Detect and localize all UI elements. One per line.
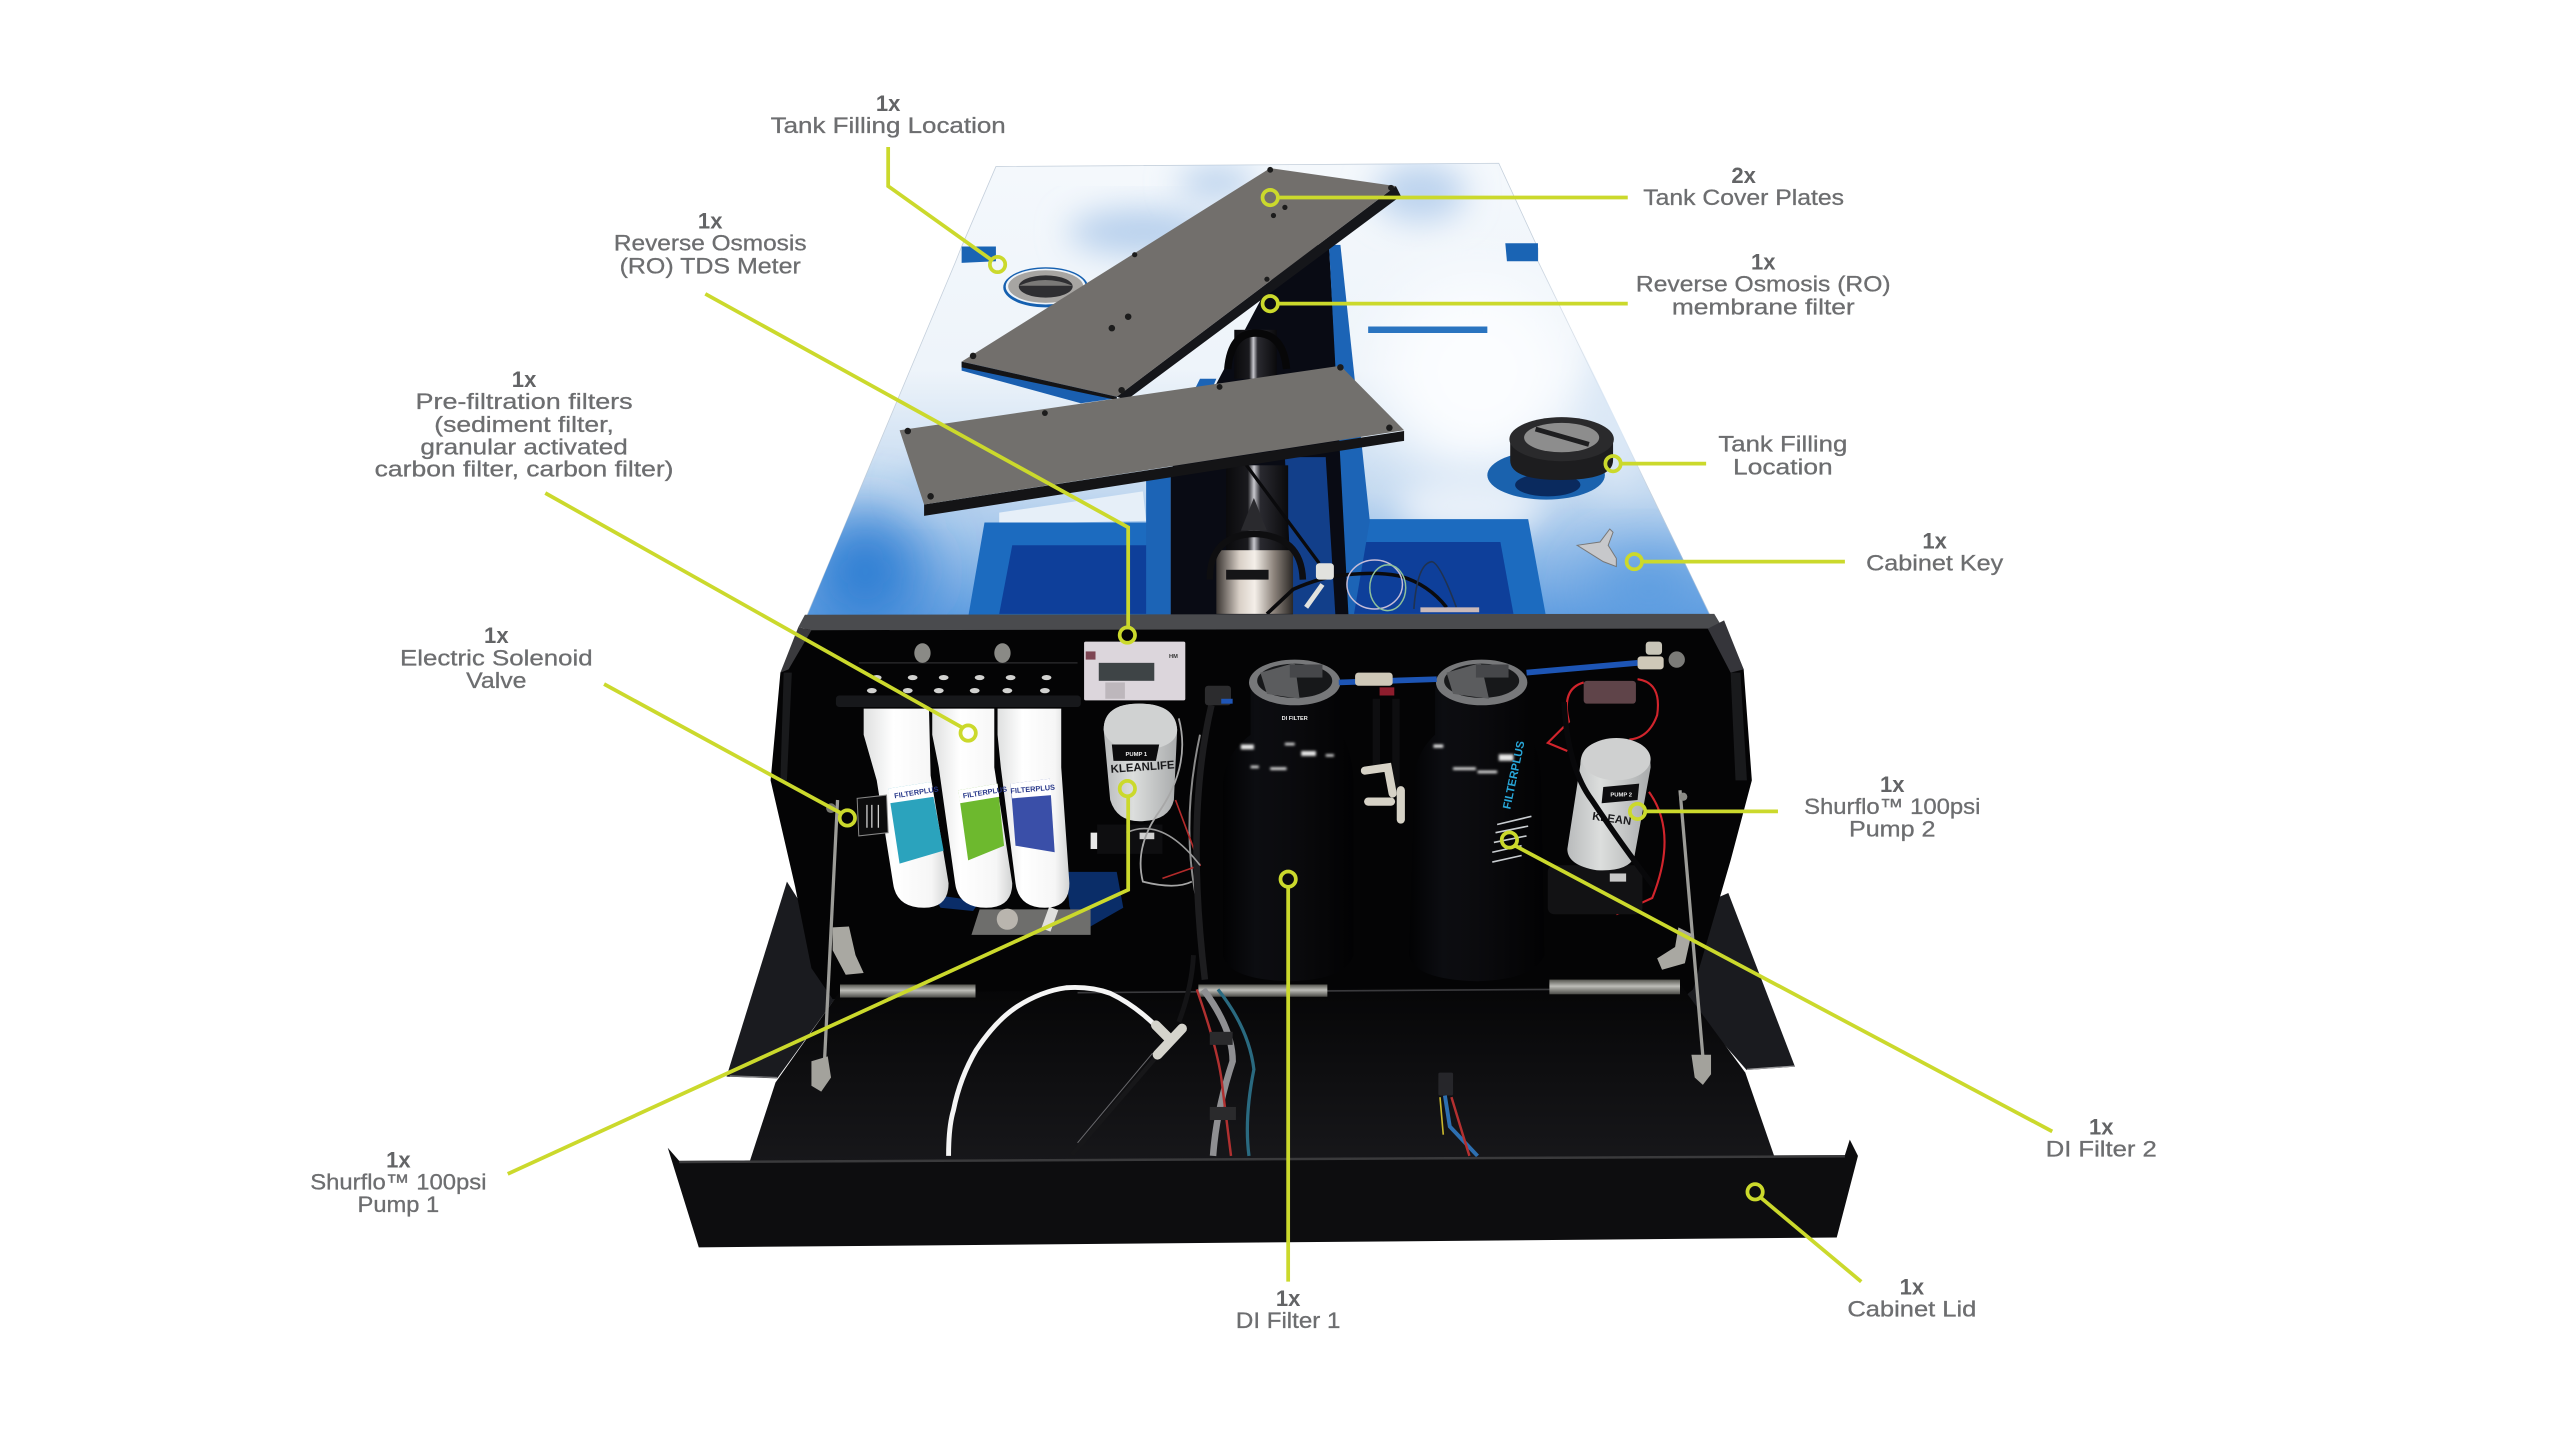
label: Reverse Osmosis — [614, 231, 807, 256]
cabinet lid front panel — [668, 1140, 1858, 1247]
right lid stay — [1657, 790, 1711, 1085]
label: DI Filter 1 — [1236, 1308, 1340, 1333]
hinges — [840, 980, 1680, 998]
mounting bracket with fittings — [836, 643, 1081, 707]
label: 1x — [386, 1147, 411, 1172]
label: Tank Filling — [1718, 431, 1847, 456]
DI filter 2 brand label — [1492, 740, 1531, 862]
leader line — [1278, 196, 1628, 199]
callout: RO TDS meter — [614, 209, 1135, 643]
callout: pre-filtration filters — [375, 367, 976, 741]
label: carbon filter, carbon filter) — [375, 457, 673, 482]
label: 1x — [1900, 1275, 1925, 1300]
blue feed pipe and fitting — [1527, 642, 1685, 673]
label: 1x — [1276, 1286, 1301, 1311]
RO membrane housing — [1210, 330, 1479, 614]
callout: tank cover plates — [1263, 163, 1844, 210]
filling location, right cap and opening — [1487, 417, 1614, 500]
Shurflo pump 2: PUMP 2 — [1610, 793, 1633, 799]
filter label: carbon — [1010, 779, 1055, 852]
marker — [840, 810, 855, 826]
label: Cabinet Key — [1866, 551, 2003, 576]
tank cover plate, upper — [962, 167, 1401, 403]
label: DI Filter 2 — [2046, 1137, 2157, 1162]
marker — [1630, 804, 1645, 819]
leader line — [705, 294, 1128, 627]
Shurflo pump 1 — [1091, 704, 1177, 854]
label: Shurflo™ 100psi — [310, 1169, 487, 1194]
marker — [1120, 627, 1135, 643]
left pit — [968, 522, 1171, 617]
label: 1x — [484, 623, 509, 648]
callout: electric solenoid valve — [400, 623, 855, 826]
marker — [1120, 781, 1135, 796]
label: 1x — [1922, 529, 1948, 554]
fuse holder and red wiring — [1548, 679, 1665, 914]
marker — [1502, 832, 1517, 848]
label: 1x — [1751, 249, 1776, 274]
label: 1x — [698, 209, 723, 234]
filter label: carbon: FILTERPLUS — [1010, 783, 1055, 795]
leader line — [1278, 303, 1628, 305]
label: Tank Filling Location — [771, 113, 1006, 138]
label: Tank Cover Plates — [1643, 185, 1844, 210]
label: Pre-filtration filters — [416, 389, 633, 414]
Shurflo pump 1: PUMP 1 — [1125, 752, 1148, 758]
DI filter 1: DI FILTER — [1282, 716, 1308, 722]
callout: tank filling location, top — [771, 91, 1006, 272]
Shurflo pump 2: KLEAN — [1591, 811, 1632, 828]
slot — [1368, 327, 1487, 333]
tank cover plate, lower — [900, 364, 1404, 516]
cable harness — [1197, 989, 1254, 1156]
label: Reverse Osmosis (RO) — [1636, 271, 1891, 296]
filter label: sediment — [888, 782, 944, 864]
support rails — [727, 882, 1795, 1078]
filter label: granular activated carbon: FILTERPLUS — [962, 784, 1008, 800]
solenoid valve label plate — [857, 795, 888, 836]
marker — [960, 725, 976, 741]
DI filter 2 brand label: FILTERPLUS — [1501, 740, 1528, 810]
label: Pump 2 — [1849, 817, 1936, 842]
callout: Shurflo pump 1 — [310, 781, 1135, 1217]
callout: cabinet lid — [1747, 1184, 1976, 1322]
TDS meter: HM — [1169, 654, 1178, 660]
label: Location — [1733, 454, 1833, 479]
tank body — [805, 163, 1711, 630]
leader line — [604, 684, 841, 813]
marker — [1263, 190, 1278, 205]
DI filter 1 — [1205, 660, 1353, 981]
label: granular activated — [420, 435, 628, 460]
label: membrane filter — [1672, 294, 1855, 319]
solenoid bracket — [971, 907, 1091, 935]
product photo: water tank and cabinet — [668, 163, 1858, 1247]
leader line — [1621, 463, 1706, 465]
filter label: granular activated carbon — [958, 784, 1008, 860]
label: 1x — [876, 91, 901, 116]
leader line — [1515, 846, 2052, 1131]
label: Electric Solenoid — [400, 645, 593, 670]
callout: DI filter 1 — [1236, 872, 1340, 1333]
right pit — [1353, 519, 1546, 617]
label: (RO) TDS Meter — [620, 253, 801, 278]
label: 2x — [1731, 163, 1757, 188]
callout: cabinet key — [1627, 529, 2003, 576]
white water hose and fitting — [949, 955, 1193, 1156]
centre channel — [1171, 245, 1350, 617]
label: 1x — [2089, 1115, 2114, 1140]
leader line — [1287, 888, 1289, 1282]
left lid stay — [811, 800, 864, 1092]
callout: DI filter 2 — [1502, 832, 2157, 1162]
marker — [1747, 1184, 1763, 1200]
Shurflo pump 2 — [1548, 702, 1654, 914]
filter label: sediment: FILTERPLUS — [894, 784, 939, 800]
marker — [1627, 554, 1642, 569]
callout: reverse osmosis membrane filter — [1263, 249, 1891, 319]
leader line — [508, 797, 1128, 1174]
leader line — [1646, 810, 1778, 813]
label: 1x — [1880, 772, 1905, 797]
TDS meter — [1084, 642, 1185, 700]
tabs — [962, 247, 996, 263]
Shurflo pump 1: KLEANLIFE — [1110, 759, 1175, 776]
pre-filtration filters — [864, 709, 1069, 908]
label: Pump 1 — [358, 1192, 439, 1217]
marker — [990, 257, 1005, 272]
label: Valve — [466, 668, 527, 693]
cabinet body — [771, 614, 1752, 999]
callout: tank filling location, right — [1605, 431, 1847, 479]
plumbing between DI filters — [1339, 673, 1437, 820]
marker — [1605, 456, 1621, 471]
label: Cabinet Lid — [1847, 1297, 1976, 1322]
leader line — [545, 493, 963, 728]
label: 1x — [512, 367, 537, 392]
label: (sediment filter, — [434, 412, 614, 437]
DI filter 2 — [1409, 660, 1544, 981]
bundled wiring near pump 1 — [1127, 705, 1211, 980]
white strip above left pit — [999, 491, 1146, 524]
connector loom on tray — [1438, 1073, 1478, 1156]
cabinet key — [1577, 529, 1616, 567]
leader line — [1641, 560, 1845, 563]
filling location, left cap — [1003, 267, 1088, 307]
label: Shurflo™ 100psi — [1804, 794, 1980, 819]
leader line — [888, 147, 991, 260]
drawer tray — [749, 986, 1775, 1162]
leader line — [1762, 1198, 1861, 1282]
marker — [1280, 872, 1296, 887]
marker — [1263, 296, 1278, 311]
blue reservoir glimpses behind filters — [934, 872, 1123, 934]
callout: Shurflo pump 2 — [1630, 772, 1980, 842]
